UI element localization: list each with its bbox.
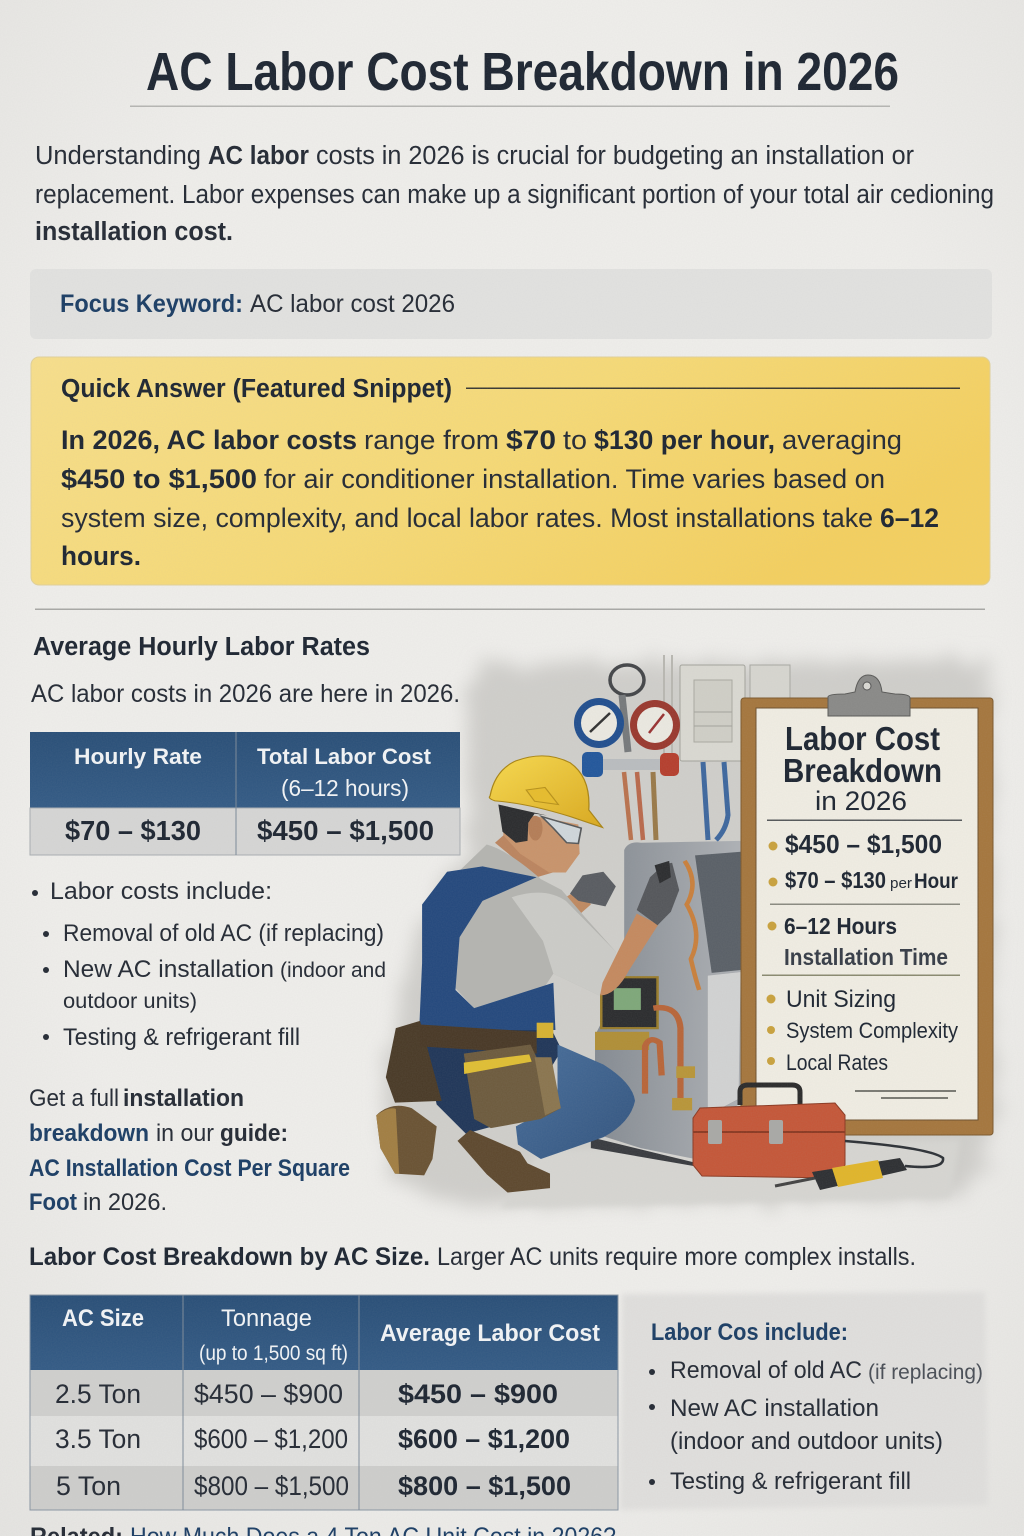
table: labor cost by AC size [30,1295,618,1510]
table header: Tonnage [221,1305,312,1332]
clipboard heading: in 2026 [815,786,907,816]
clipboard factors list: System Complexity [786,1018,958,1043]
forearm [600,914,658,995]
table row 3.5 ton: 3.5 Ton [55,1424,141,1454]
head [503,810,580,873]
guide link text block: installation [123,1085,244,1112]
sub-heading text: AC labor costs in 2026 are here in 2026. [31,680,460,708]
focus keyword box: AC labor cost 2026 [250,290,455,318]
clipboard cost items: $450 – $1,500 [785,829,942,859]
guide link text block: AC Installation Cost Per Square [29,1155,350,1182]
table row 5 ton: $800 – $1,500 [398,1471,571,1501]
panel: labor costs include (right): Testing & refrigerant fill [670,1468,911,1495]
intro text block: Understanding [35,142,201,170]
guide link text block: guide: [220,1120,288,1147]
AC unit [591,841,745,1166]
rear forearm and glove [566,886,591,914]
panel: clipboard [741,675,993,1135]
illustration: technician, AC unit and clipboard [376,655,996,1208]
sleeve [512,893,616,995]
icon: electrical tester with cable [775,1141,943,1190]
tool belt [420,1025,537,1054]
worker and AC unit drawn in scaled coordinates [376,756,745,1192]
list: labor costs include: Removal of old AC (if replacing) [63,920,384,947]
table row 3.5 ton [55,1424,570,1454]
table header: (up to 1,500 sq ft) [199,1342,348,1365]
table row 2.5 ton [55,1379,558,1409]
table row 2.5 ton: $450 – $900 [194,1379,343,1409]
heading: labor cost by AC size: Larger AC units require more complex installs. [437,1243,916,1271]
panel: labor costs include (right): Removal of old AC [670,1357,862,1384]
quick answer heading: Quick Answer (Featured Snippet) [61,375,452,403]
clipboard cost items: per [890,875,912,892]
safety glasses [542,817,581,843]
icon: red toolbox [693,1085,845,1178]
table header: Average Labor Cost [380,1320,600,1347]
quick answer text: In 2026, AC labor costs [61,425,357,455]
intro text block: AC labor [208,142,309,170]
table header [62,1305,600,1365]
panel: labor costs include (right): New AC installation [670,1395,879,1422]
list: labor costs include: New AC installation [63,956,274,983]
intro text block: costs in 2026 is crucial for budgeting an installation or [316,142,915,170]
heading: labor cost by AC size: Labor Cost Breakdown by AC Size. [29,1243,430,1271]
clipboard time item: 6–12 Hours [784,913,897,939]
rear boot [376,1106,437,1175]
quick answer text: range from [364,425,499,455]
heading: average hourly labor rates: Average Hourly Labor Rates [33,633,370,661]
worker [376,756,679,1192]
table row 5 ton [56,1471,571,1501]
guide link text block: in 2026. [83,1189,167,1216]
intro text block: installation cost. [35,218,233,246]
focus keyword box [30,269,992,339]
table: hourly rates: Total Labor Cost [257,744,431,769]
glove [637,863,679,925]
shirt [447,845,616,1008]
quick answer text: system size, complexity, and local labor rates. Most installations take [61,503,873,533]
table row 2.5 ton: 2.5 Ton [55,1379,141,1409]
guide link text block: Foot [29,1189,77,1216]
panel: labor costs include (right) [620,1292,988,1510]
handheld meter [655,861,671,883]
quick answer text: $70 [506,425,556,455]
table header: AC Size [62,1305,144,1332]
clipboard heading: Breakdown [783,752,942,789]
icon: manifold gauges [574,665,680,840]
clipboard factors list [766,986,958,1075]
focus keyword box: Focus Keyword: [60,290,243,318]
main pouch [464,1045,561,1128]
clipboard factors list: Unit Sizing [786,986,896,1013]
table row 5 ton: 5 Ton [56,1471,121,1501]
list: labor costs include: Testing & refrigerant fill [63,1024,300,1051]
guide link text block: in our [156,1120,214,1147]
quick answer text [61,425,939,571]
guide link text block: breakdown [29,1120,149,1147]
quick answer text: $450 to $1,500 [61,464,257,494]
smudged wall background [385,660,996,1206]
hard hat [489,756,603,827]
intro text block [35,142,994,246]
jeans [516,1045,635,1159]
list: labor costs include: Labor costs include: [50,878,272,905]
panel: labor costs include (right): Labor Cos include: [651,1319,848,1346]
quick answer text: to [563,425,587,455]
clipboard cost items: $70 – $130 [785,867,886,893]
clipboard cost items: Hour [914,870,958,893]
clipboard heading: Labor Cost [785,720,940,757]
panel: labor costs include (right): (if replacing) [868,1361,983,1384]
quick answer text: $130 per hour, [594,425,775,455]
table row 5 ton: $800 – $1,500 [194,1471,349,1501]
hair [498,805,547,843]
clipboard time item: Installation Time [784,944,948,970]
overall straps and bib [419,866,555,1030]
table: hourly rates: $70 – $130 [65,815,201,846]
list: labor costs include: (indoor and [280,959,386,982]
table: hourly rates: $450 – $1,500 [257,815,434,846]
table: hourly rates [30,732,460,855]
dark leg [420,1025,562,1134]
conduit pipes [703,762,728,840]
table row 3.5 ton: $600 – $1,200 [194,1424,348,1454]
guide link text block [29,1085,350,1216]
table row 2.5 ton: $450 – $900 [398,1379,558,1409]
front boot [458,1130,550,1192]
quick answer text: for air conditioner installation. Time varies based on [264,464,885,494]
quick answer text: hours. [61,541,141,571]
table: hourly rates: (6–12 hours) [281,775,409,801]
panel: labor costs include (right): (indoor and outdoor units) [670,1428,943,1455]
table: hourly rates: Hourly Rate [74,744,202,769]
table row 3.5 ton: $600 – $1,200 [398,1424,570,1454]
neck [495,828,555,877]
clipboard cost items [768,829,958,893]
heading: labor cost by AC size [29,1243,916,1271]
clipboard clip [828,675,910,716]
rear pouch [386,1021,442,1103]
ear [528,816,543,841]
guide link text block: Get a full [29,1085,119,1112]
quick answer text: averaging [782,425,902,455]
electrical box [664,655,790,761]
list: labor costs include [32,878,386,1051]
clipboard heading [783,720,942,816]
clipboard time item [768,913,948,970]
list: labor costs include: outdoor units) [63,990,197,1013]
panel: quick answer [31,357,990,585]
title: AC Labor Cost Breakdown in 2026 [146,42,899,102]
intro text block: replacement. Labor expenses can make up a significant portion of your total air cedioning [35,181,994,209]
quick answer text: 6–12 [880,503,939,533]
clipboard factors list: Local Rates [786,1050,888,1075]
